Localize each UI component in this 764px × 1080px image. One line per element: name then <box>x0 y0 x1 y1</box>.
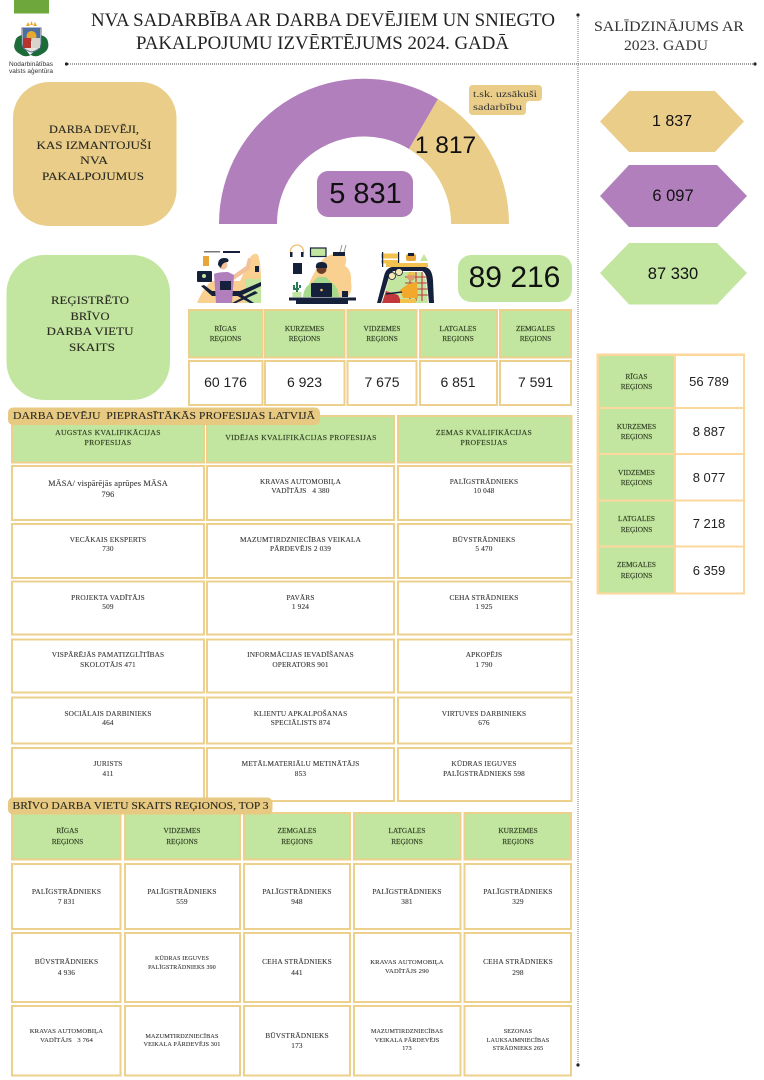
callout: of which started cooperation: t.sk. uzsākuši <box>473 90 537 100</box>
top 3 Kurzemes: SEZONAS <box>504 1029 533 1035</box>
top 3 Kurzemes: STRĀDNIEKS 265 <box>493 1045 543 1052</box>
top 1 Zemgales: 948 <box>291 897 303 906</box>
row 1 low <box>398 466 572 520</box>
value Rīgas <box>189 361 262 405</box>
top 2 Kurzemes <box>464 933 571 1002</box>
top 3 Zemgales: BŪVSTRĀDNIEKS <box>265 1031 329 1040</box>
top 1 Vidzemes <box>125 864 240 929</box>
header Rīgas: RĪGAS <box>57 826 78 835</box>
top 1 Zemgales: PALĪGSTRĀDNIEKS <box>262 887 332 896</box>
header Latgales: LATGALES <box>389 826 425 835</box>
top 2 Zemgales: CEHA STRĀDNIEKS <box>262 957 332 966</box>
value 1 817: 1 817 <box>415 132 476 159</box>
header high qualification: PROFESIJAS <box>84 438 132 447</box>
total 89 216 pill: 89 216 <box>469 261 560 294</box>
top 2 Vidzemes: KŪDRAS IEGUVES <box>155 955 209 962</box>
top 1 Latgales <box>354 864 460 929</box>
top 2 Kurzemes: CEHA STRĀDNIEKS <box>483 957 553 966</box>
row 3 medium: PAVĀRS <box>286 593 315 602</box>
row 3 high: 509 <box>102 602 114 611</box>
tan arc segment <box>409 99 509 224</box>
title <box>91 11 555 54</box>
top 2 Rīgas: 4 936 <box>58 968 75 977</box>
top 1 Vidzemes: PALĪGSTRĀDNIEKS <box>147 887 217 896</box>
row 5 high <box>12 698 204 744</box>
row 5 high: SOCIĀLAIS DARBINIEKS <box>64 709 152 718</box>
header Vidzemes: VIDZEMES <box>364 324 400 333</box>
value Kurzemes <box>265 361 344 405</box>
row 6 low: KŪDRAS IEGUVES <box>451 759 517 768</box>
panel: registered vacancies: SKAITS <box>69 342 115 354</box>
row 4 low: APKOPĒJS <box>466 650 502 659</box>
row 1 medium: KRAVAS AUTOMOBIĻA <box>260 477 342 487</box>
title: PAKALPOJUMU IZVĒRTĒJUMS 2024. GADĀ <box>136 34 510 54</box>
comparison hexagon 1 837: 1 837 <box>652 113 692 130</box>
total 89 216 pill <box>458 255 572 302</box>
header Rīgas <box>12 813 120 860</box>
row 2 medium <box>207 524 394 578</box>
row Latgales: REĢIONS <box>621 525 652 534</box>
header low qualification: ZEMAS KVALIFIKĀCIJAS <box>436 428 532 437</box>
top 3 Rīgas <box>12 1006 120 1076</box>
row Rīgas <box>598 355 744 408</box>
row Vidzemes: VIDZEMES <box>618 468 655 477</box>
row Latgales <box>598 500 744 546</box>
table: most demanded professions <box>12 416 572 801</box>
row Kurzemes <box>598 408 744 454</box>
top 3 Rīgas: KRAVAS AUTOMOBIĻA <box>30 1028 103 1035</box>
comparison hexagon 87 330 <box>600 243 747 304</box>
row 2 medium: MAZUMTIRDZNIECĪBAS VEIKALA <box>240 535 362 544</box>
row Latgales: 7 218 <box>693 516 725 531</box>
logo: Latvian coat of arms with agency name: valsts aģentūra <box>9 67 53 75</box>
header Latgales: REĢIONS <box>391 837 423 846</box>
row 3 high: PROJEKTA VADĪTĀJS <box>71 593 145 602</box>
row Rīgas: REĢIONS <box>621 382 652 391</box>
header Latgales <box>420 310 497 358</box>
top 3 Vidzemes: VEIKALA PĀRDEVĒJS 301 <box>143 1041 221 1048</box>
top 1 Latgales: PALĪGSTRĀDNIEKS <box>372 887 442 896</box>
panel: registered vacancies: DARBA VIETU <box>46 326 134 338</box>
row 2 low: 5 470 <box>475 544 493 553</box>
row Zemgales: REĢIONS <box>621 571 652 580</box>
title: NVA SADARBĪBA AR DARBA DEVĒJIEM UN SNIEGTO <box>91 11 555 31</box>
row 1 high: 796 <box>102 490 114 499</box>
header Kurzemes: REĢIONS <box>289 334 320 343</box>
row Zemgales: 6 359 <box>693 563 725 578</box>
header high qualification: AUGSTAS KVALIFIKĀCIJAS <box>55 428 161 437</box>
top 1 Kurzemes <box>464 864 571 929</box>
top 2 Zemgales <box>244 933 350 1002</box>
header Rīgas <box>189 310 262 358</box>
row Kurzemes: REĢIONS <box>621 432 652 441</box>
row 1 medium <box>207 466 394 520</box>
row Vidzemes <box>598 454 744 500</box>
row 5 medium: KLIENTU APKALPOŠANAS <box>254 708 347 718</box>
table: vacancies by region <box>189 310 571 405</box>
top 1 Rīgas <box>12 864 120 929</box>
row 4 medium: INFORMĀCIJAS IEVADĪŠANAS <box>247 649 354 659</box>
comparison hexagon 6 097: 6 097 <box>652 187 694 205</box>
top 1 Kurzemes: PALĪGSTRĀDNIEKS <box>483 887 553 896</box>
comparison hexagon 6 097 <box>600 165 747 227</box>
header Zemgales: REĢIONS <box>520 334 551 343</box>
top 3 Kurzemes <box>464 1006 571 1076</box>
row 3 high <box>12 582 204 634</box>
comparison hexagon 87 330: 87 330 <box>648 265 698 283</box>
table: top 3 vacancies by region <box>12 813 571 1076</box>
header Rīgas: REĢIONS <box>210 334 241 343</box>
top 3 Zemgales: 173 <box>291 1041 303 1050</box>
row 4 medium <box>207 640 394 692</box>
header Latgales: REĢIONS <box>442 334 474 343</box>
header Zemgales: REĢIONS <box>281 837 313 846</box>
chart: half-donut of employers <box>219 79 509 224</box>
header Vidzemes <box>125 813 240 860</box>
top 2 Vidzemes: PALĪGSTRĀDNIEKS 390 <box>148 964 216 971</box>
header Kurzemes: KURZEMES <box>498 826 538 835</box>
header medium qualification <box>207 416 394 462</box>
row 2 medium: PĀRDEVĒJS 2 039 <box>270 544 331 553</box>
green top tab <box>14 0 49 14</box>
row Zemgales: ZEMGALES <box>617 560 656 569</box>
row 2 low <box>398 524 572 578</box>
top 1 Kurzemes: 329 <box>512 897 524 906</box>
header Kurzemes: REĢIONS <box>502 837 534 846</box>
header low qualification: PROFESIJAS <box>460 438 508 447</box>
section heading: top 3 vacancies by region <box>8 798 272 814</box>
panel: employers who used NVA services <box>13 82 176 226</box>
top 3 Rīgas: VADĪTĀJS 3 764 <box>40 1037 93 1044</box>
top 1 Zemgales <box>244 864 350 929</box>
icon: laptop worker illustration <box>289 245 356 304</box>
row 2 high <box>12 524 204 578</box>
row 5 low: 676 <box>478 718 490 727</box>
top 2 Zemgales: 441 <box>291 968 303 977</box>
header Rīgas: REĢIONS <box>52 837 83 846</box>
row 3 medium: 1 924 <box>292 602 309 611</box>
icon: forklift driver illustration <box>377 252 434 303</box>
callout: of which started cooperation <box>469 85 542 115</box>
icon: technician illustration <box>197 251 261 303</box>
panel: registered vacancies <box>6 255 170 400</box>
header low qualification <box>398 416 572 462</box>
panel: employers who used NVA services: NVA <box>80 155 109 167</box>
purple arc segment <box>219 79 438 224</box>
row Kurzemes: KURZEMES <box>617 422 656 431</box>
row 3 medium <box>207 582 394 634</box>
row Latgales: LATGALES <box>618 514 655 523</box>
value Zemgales <box>500 361 571 405</box>
row 6 high <box>12 748 204 801</box>
row 1 medium: VADĪTĀJS 4 380 <box>271 486 330 495</box>
top 2 Latgales: VADĪTĀJS 290 <box>385 968 430 975</box>
row 1 low: 10 048 <box>474 486 495 495</box>
row 4 low: 1 790 <box>475 660 493 669</box>
row 6 low <box>398 748 572 801</box>
value Latgales <box>420 361 497 405</box>
top 3 Zemgales <box>244 1006 350 1076</box>
top 1 Rīgas: PALĪGSTRĀDNIEKS <box>32 887 101 896</box>
callout: of which started cooperation: sadarbību <box>473 103 522 113</box>
row 6 medium: 853 <box>295 769 306 778</box>
header Zemgales <box>244 813 350 860</box>
logo: Latvian coat of arms with agency name <box>9 21 54 75</box>
value Zemgales: 7 591 <box>518 374 553 390</box>
top 2 Kurzemes: 298 <box>512 968 524 977</box>
header Kurzemes: KURZEMES <box>285 324 324 333</box>
panel: registered vacancies: REĢISTRĒTO <box>51 294 129 307</box>
row Vidzemes: REĢIONS <box>621 478 652 487</box>
value Latgales: 6 851 <box>440 374 476 390</box>
panel: registered vacancies: BRĪVO <box>70 310 110 323</box>
top 1 Rīgas: 7 831 <box>58 897 75 906</box>
row 4 low <box>398 640 572 692</box>
row 1 low: PALĪGSTRĀDNIEKS <box>450 477 518 486</box>
top 3 Latgales: 173 <box>402 1046 412 1052</box>
row 4 high: SKOLOTĀJS 471 <box>80 660 136 669</box>
row 5 high: 464 <box>102 718 114 727</box>
row 5 medium <box>207 698 394 744</box>
header Kurzemes <box>265 310 344 358</box>
top 3 Vidzemes: MAZUMTIRDZNIECĪBAS <box>145 1033 219 1040</box>
row 3 low <box>398 582 572 634</box>
row 4 high <box>12 640 204 692</box>
row 3 low: CEHA STRĀDNIEKS <box>450 593 518 602</box>
row 5 low: VIRTUVES DARBINIEKS <box>442 709 526 718</box>
top 3 Vidzemes <box>125 1006 240 1076</box>
header Latgales: LATGALES <box>440 324 476 333</box>
panel: employers who used NVA services: PAKALPOJUMUS <box>42 171 144 183</box>
header Vidzemes: VIDZEMES <box>164 826 200 835</box>
row 4 medium: OPERATORS 901 <box>272 660 329 669</box>
value Kurzemes: 6 923 <box>287 374 322 390</box>
panel: employers who used NVA services: DARBA DEVĒJI, <box>49 123 139 136</box>
heading: comparison with 2023: 2023. GADU <box>624 38 709 54</box>
table: comparison by region 2023 <box>598 354 744 594</box>
panel: employers who used NVA services: KAS IZMANTOJUŠI <box>36 138 152 152</box>
row Vidzemes: 8 077 <box>693 470 725 485</box>
row 6 high: 411 <box>102 769 114 778</box>
header Latgales <box>354 813 460 860</box>
section heading: most demanded professions: DARBA DEVĒJU PIEPRASĪTĀKĀS PROFESIJAS LATVIJĀ <box>13 411 316 422</box>
top 1 Vidzemes: 559 <box>176 897 188 906</box>
row 4 high: VISPĀRĒJĀS PAMATIZGLĪTĪBAS <box>52 650 164 659</box>
row Zemgales <box>598 546 744 594</box>
total 5 831 pill: 5 831 <box>329 178 402 210</box>
value Vidzemes: 7 675 <box>364 374 400 390</box>
row 5 medium: SPECIĀLISTS 874 <box>271 718 331 727</box>
top 3 Latgales: MAZUMTIRDZNIECĪBAS <box>371 1028 444 1035</box>
total 5 831 pill <box>317 171 413 217</box>
heading: comparison with 2023: SALĪDZINĀJUMS AR <box>594 19 744 35</box>
row 1 high <box>12 466 204 520</box>
row 2 high: VECĀKAIS EKSPERTS <box>70 535 146 544</box>
header medium qualification: VIDĒJAS KVALIFIKĀCIJAS PROFESIJAS <box>225 433 377 442</box>
header Rīgas: RĪGAS <box>215 324 236 333</box>
row Rīgas: RĪGAS <box>626 372 647 381</box>
row 2 high: 730 <box>102 544 114 553</box>
section heading: top 3 vacancies by region: BRĪVO DARBA VIETU SKAITS REĢIONOS, TOP 3 <box>12 801 268 812</box>
row 1 high: MĀSA/ vispārējās aprūpes MĀSA <box>48 479 168 488</box>
row 6 low: PALĪGSTRĀDNIEKS 598 <box>443 769 525 778</box>
row 6 medium <box>207 748 394 801</box>
row 6 high: JURISTS <box>93 759 123 768</box>
row Kurzemes: 8 887 <box>693 424 725 439</box>
top 2 Latgales: KRAVAS AUTOMOBIĻA <box>370 959 444 966</box>
top 1 Latgales: 381 <box>401 897 413 906</box>
header Kurzemes <box>464 813 571 860</box>
section heading: most demanded professions <box>8 408 320 425</box>
header Zemgales <box>500 310 571 358</box>
header Vidzemes: REĢIONS <box>166 837 198 846</box>
header Zemgales: ZEMGALES <box>516 324 555 333</box>
header high qualification <box>12 416 204 462</box>
row Rīgas: 56 789 <box>689 374 729 389</box>
heading: comparison with 2023 <box>594 19 744 54</box>
row 3 low: 1 925 <box>475 602 493 611</box>
value Rīgas: 60 176 <box>204 374 247 390</box>
top 2 Rīgas <box>12 933 120 1002</box>
top 3 Kurzemes: LAUKSAIMNIECĪBAS <box>487 1037 550 1044</box>
logo: Latvian coat of arms with agency name: Nodarbinātības <box>9 61 54 68</box>
comparison hexagon 1 837 <box>600 91 744 152</box>
top 2 Rīgas: BŪVSTRĀDNIEKS <box>35 957 98 966</box>
row 5 low <box>398 698 572 744</box>
value Vidzemes <box>348 361 416 405</box>
header Vidzemes <box>348 310 416 358</box>
row 6 medium: METĀLMATERIĀLU METINĀTĀJS <box>242 759 359 768</box>
top 3 Latgales <box>354 1006 460 1076</box>
header Zemgales: ZEMGALES <box>278 826 316 835</box>
top 2 Latgales <box>354 933 460 1002</box>
top 3 Latgales: VEIKALA PĀRDEVĒJS <box>375 1037 440 1044</box>
header Vidzemes: REĢIONS <box>366 334 398 343</box>
row 2 low: BŪVSTRĀDNIEKS <box>453 535 515 544</box>
top 2 Vidzemes <box>125 933 240 1002</box>
